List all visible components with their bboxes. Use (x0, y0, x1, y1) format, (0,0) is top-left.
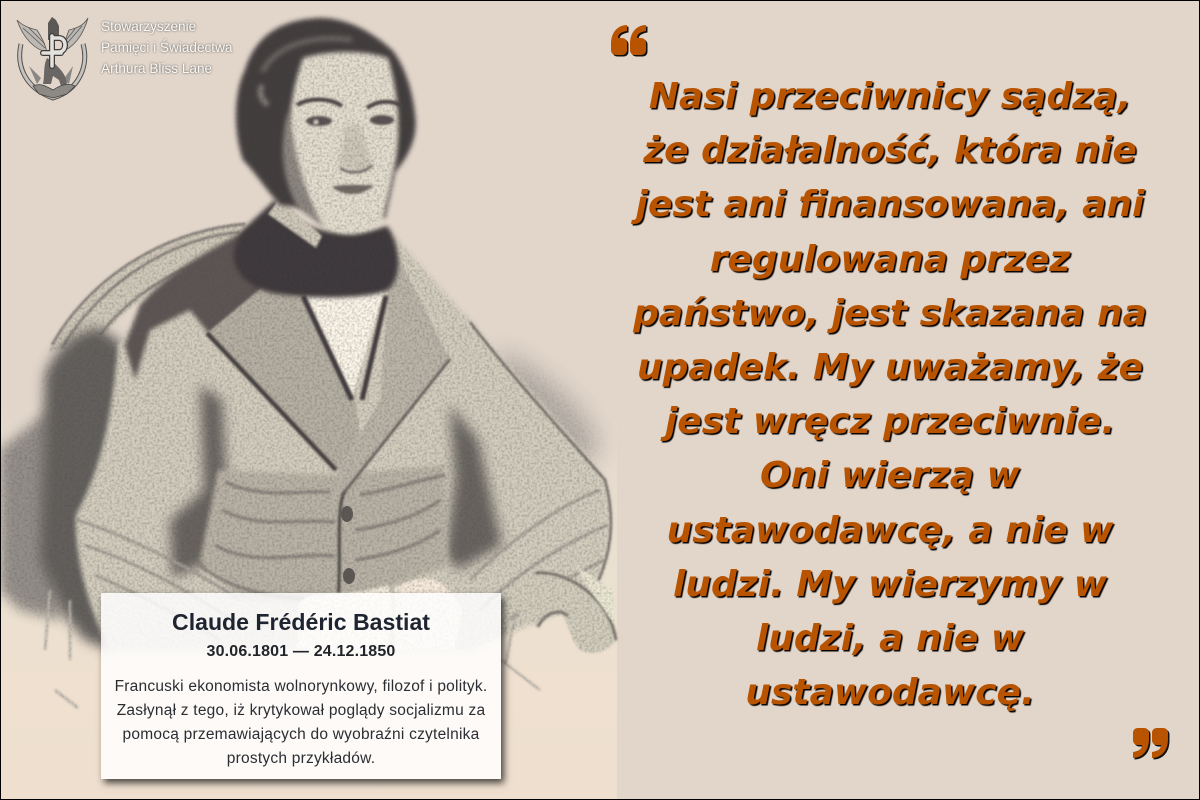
organisation name (100, 19, 234, 76)
biography text: Zasłynął z tego, iż krytykował poglądy socjalizmu za (117, 702, 485, 719)
organisation name: Stowarzyszenie (101, 19, 196, 34)
coat and sleeves (76, 228, 611, 650)
quotation text: ludzi, a nie w (756, 618, 1024, 659)
eagle body (43, 58, 67, 86)
eagle head (48, 17, 59, 40)
biography card (101, 593, 501, 779)
cravat (234, 200, 398, 298)
shirt front (305, 288, 385, 395)
quotation text: regulowana przez (710, 239, 1070, 280)
biography text: pomocą przemawiających do wyobraźni czytelnika (123, 726, 479, 743)
drawn figure (0, 18, 616, 708)
ring highlight (20, 44, 85, 98)
quotation text: upadek. My uważamy, że (637, 347, 1143, 388)
left haze (0, 410, 60, 620)
quotation text: ustawodawcę, a nie w (667, 510, 1113, 551)
icon: closing quotation mark (1133, 728, 1170, 760)
quotation text: państwo, jest skazana na (633, 293, 1147, 334)
waistcoat buttons (341, 506, 355, 584)
biography text: Francuski ekonomista wolnorynkowy, filozof i polityk. (115, 678, 487, 695)
quotation text: ustawodawcę. (745, 672, 1035, 713)
base (33, 84, 75, 98)
chair back (40, 222, 250, 650)
side shapes (29, 66, 73, 84)
paper background (0, 0, 617, 800)
organisation name: Arthura Bliss Lane (101, 61, 212, 76)
head (236, 18, 416, 234)
hands (298, 579, 462, 650)
quotation text: ludzi. My wierzymy w (673, 564, 1107, 605)
quotation text: że działalność, która nie (643, 130, 1137, 171)
chair arm (500, 565, 616, 690)
icon: opening quotation mark (611, 25, 648, 56)
collar (268, 198, 322, 248)
biography text: prostych przykładów. (227, 750, 375, 767)
waistcoat (200, 465, 448, 605)
life dates: 30.06.1801 — 24.12.1850 (207, 643, 395, 660)
organisation name: Pamięci i Świadectwa (101, 40, 232, 55)
dark upper left coat (125, 228, 262, 380)
biography text (115, 678, 487, 767)
wreath ring (20, 44, 85, 98)
anchor P sign (43, 36, 65, 66)
logo emblem (16, 17, 88, 101)
quotation text: Oni wierzą w (760, 455, 1020, 496)
sleeve streaks below the arm (45, 590, 78, 708)
quotation text: jest wręcz przeciwnie. (665, 401, 1115, 442)
quotation text (631, 76, 1150, 760)
person name: Claude Frédéric Bastiat (172, 609, 430, 635)
eagle wings (17, 18, 88, 52)
portrait of Bastiat (1, 14, 618, 799)
coat lapels (207, 245, 450, 495)
quotation text: Nasi przeciwnicy sądzą, (649, 76, 1131, 117)
quotation text: jest ani finansowana, ani (636, 184, 1144, 225)
right shoulder haze (500, 350, 600, 470)
eyes (306, 115, 394, 126)
